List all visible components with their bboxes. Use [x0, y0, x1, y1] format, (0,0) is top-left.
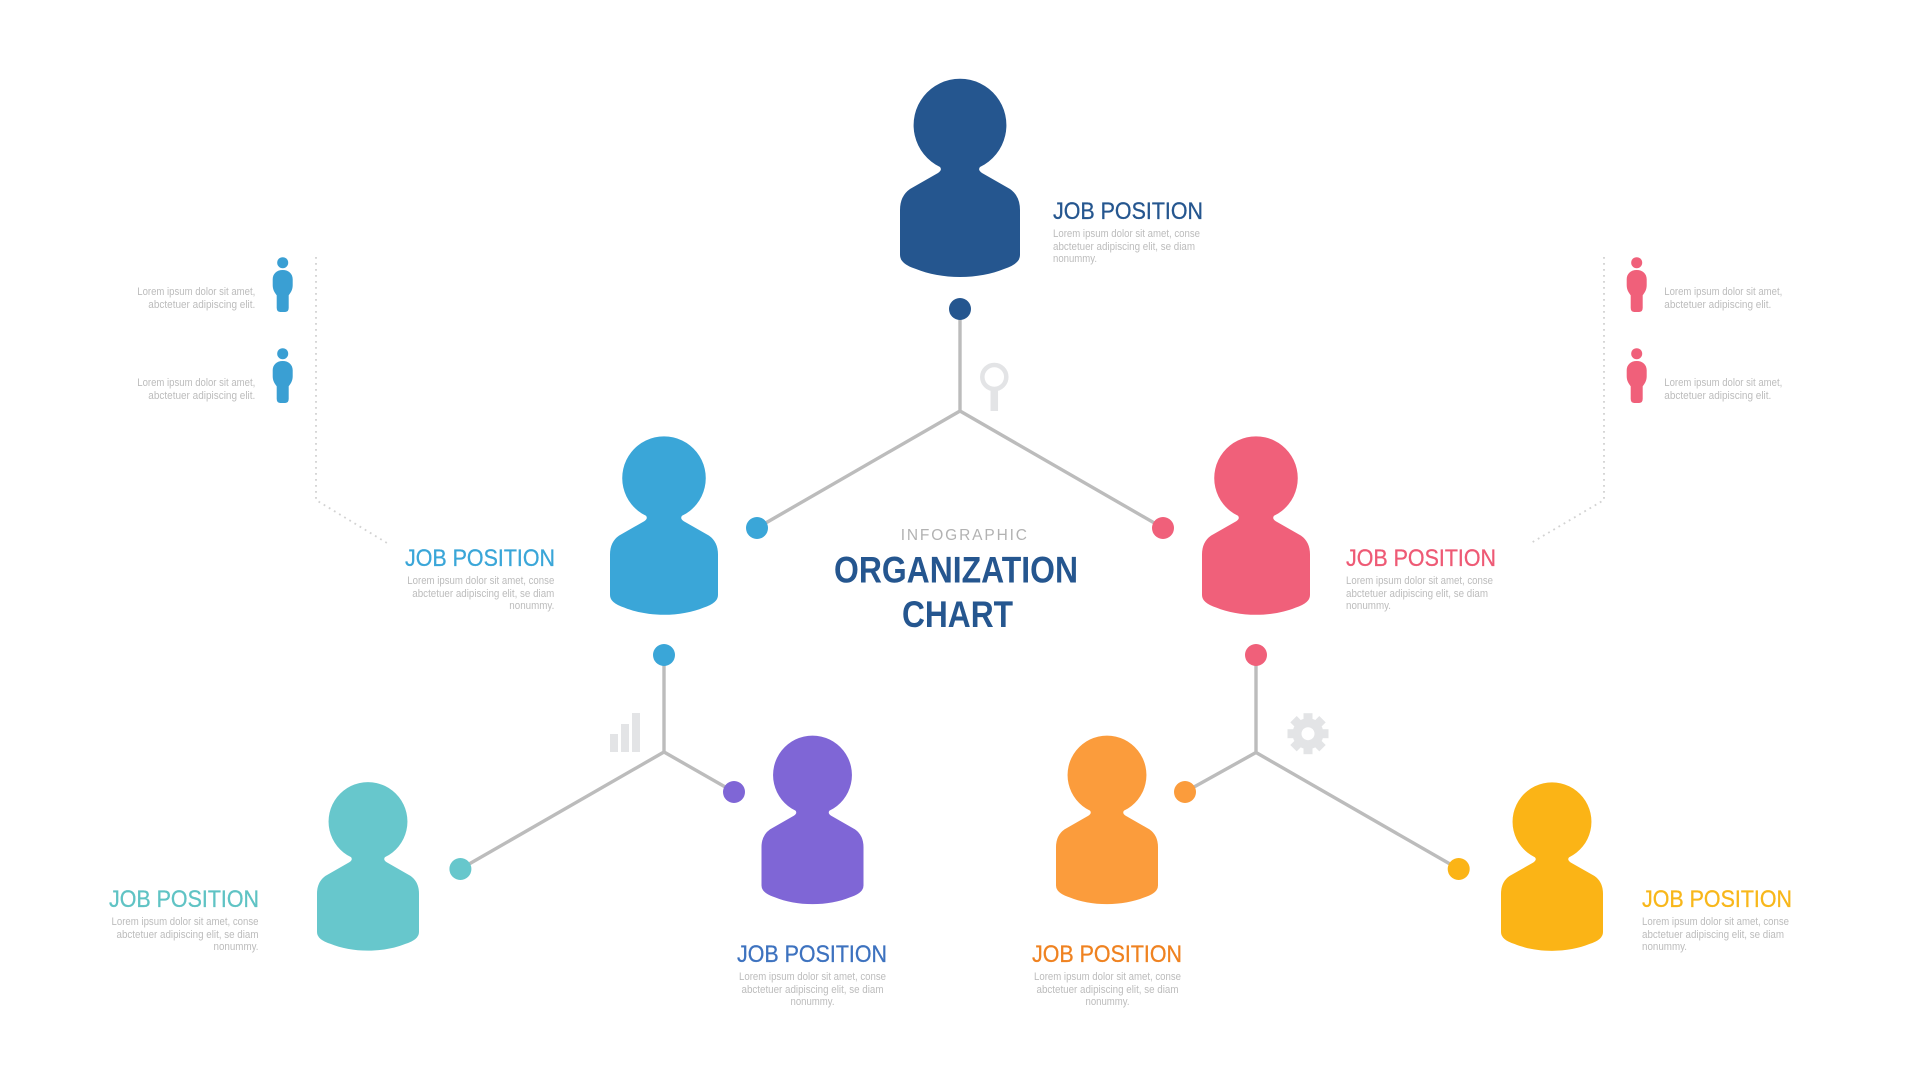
label: yellow job position: abctetuer adipiscing elit, se diam	[1642, 929, 1784, 941]
person: bottom teal	[317, 782, 419, 951]
person: top navy	[900, 79, 1020, 277]
label: top navy job position: abctetuer adipiscing elit, se diam	[1053, 241, 1195, 253]
label: purple node job position: abctetuer adipiscing elit, se diam	[742, 984, 884, 996]
node dot: blue upper	[746, 517, 768, 539]
label: blue job position: JOB POSITION	[405, 545, 555, 572]
connector lines: left branch	[460, 655, 734, 869]
label: pink job position: abctetuer adipiscing elit, se diam	[1346, 588, 1488, 600]
central title	[834, 527, 1078, 635]
label: pink job position: Lorem ipsum dolor sit amet, conse	[1346, 575, 1493, 587]
label: purple node job position: nonummy.	[790, 996, 834, 1008]
label: teal job position	[109, 886, 259, 953]
node dot: pink upper	[1152, 517, 1174, 539]
label: top navy job position	[1053, 198, 1203, 265]
small text: right 2: Lorem ipsum dolor sit amet,	[1664, 377, 1782, 389]
dotted connector: right	[1531, 257, 1604, 543]
label: yellow job position: JOB POSITION	[1642, 886, 1792, 913]
dotted connector: left	[316, 257, 387, 543]
small text: right 2: abctetuer adipiscing elit.	[1664, 390, 1771, 402]
label: teal job position: JOB POSITION	[109, 886, 259, 913]
label: blue job position: abctetuer adipiscing elit, se diam	[412, 588, 554, 600]
node dot: purple	[723, 781, 745, 803]
node dot: pink lower	[1245, 644, 1267, 666]
person: bottom orange	[1056, 736, 1158, 904]
central title: INFOGRAPHIC	[901, 527, 1027, 544]
label: purple node job position: Lorem ipsum dolor sit amet, conse	[739, 971, 886, 983]
small text: left 2: abctetuer adipiscing elit.	[148, 390, 255, 402]
label: top navy job position: JOB POSITION	[1053, 198, 1203, 225]
label: teal job position: nonummy.	[214, 941, 258, 953]
label: orange job position: nonummy.	[1086, 996, 1130, 1008]
label: pink job position: nonummy.	[1346, 600, 1391, 612]
central title: ORGANIZATION	[834, 549, 1078, 590]
small text: left 1: abctetuer adipiscing elit.	[148, 299, 255, 311]
small person: left 2	[273, 348, 293, 403]
small person: left 1	[273, 257, 293, 312]
person: middle pink	[1202, 436, 1310, 615]
label: top navy job position: nonummy.	[1053, 253, 1097, 265]
small person: right 1	[1627, 257, 1647, 312]
label: orange job position: JOB POSITION	[1032, 941, 1182, 968]
small text: right 1: abctetuer adipiscing elit.	[1664, 299, 1771, 311]
icon: bar chart	[610, 713, 640, 752]
label: orange job position	[1032, 941, 1182, 1008]
label: blue job position	[405, 545, 555, 612]
small text: right 1	[1664, 286, 1782, 311]
node dot: yellow	[1448, 858, 1470, 880]
label: yellow job position	[1642, 886, 1792, 953]
label: orange job position: Lorem ipsum dolor sit amet, conse	[1034, 971, 1181, 983]
icon: gear	[1288, 713, 1328, 754]
label: teal job position: abctetuer adipiscing elit, se diam	[116, 929, 259, 941]
small text: right 2	[1664, 377, 1782, 402]
person: middle blue	[610, 436, 718, 615]
small person: right 2	[1627, 348, 1647, 403]
connector lines: top level	[757, 309, 1163, 528]
person: bottom purple	[762, 736, 864, 904]
small text: left 1	[137, 286, 255, 311]
label: yellow job position: nonummy.	[1642, 941, 1687, 953]
small text: left 2: Lorem ipsum dolor sit amet,	[137, 377, 255, 389]
label: purple node job position: JOB POSITION	[737, 941, 887, 968]
label: pink job position	[1346, 545, 1496, 612]
label: teal job position: Lorem ipsum dolor sit amet, conse	[112, 916, 259, 928]
small text: left 2	[137, 377, 255, 402]
person: bottom yellow	[1501, 782, 1603, 951]
node dot: teal	[449, 858, 471, 880]
icon: magnifier	[982, 365, 1006, 411]
node dot: blue lower	[653, 644, 675, 666]
label: blue job position: nonummy.	[509, 600, 554, 612]
label: purple node job position	[737, 941, 887, 1008]
connector lines: right branch	[1185, 655, 1459, 869]
small text: left 1: Lorem ipsum dolor sit amet,	[137, 286, 255, 298]
node dot: orange	[1174, 781, 1196, 803]
label: orange job position: abctetuer adipiscing elit, se diam	[1036, 984, 1179, 996]
node dot: navy	[949, 298, 971, 320]
label: pink job position: JOB POSITION	[1346, 545, 1496, 572]
label: top navy job position: Lorem ipsum dolor sit amet, conse	[1053, 228, 1200, 240]
label: yellow job position: Lorem ipsum dolor sit amet, conse	[1642, 916, 1789, 928]
central title: CHART	[902, 594, 1013, 635]
label: blue job position: Lorem ipsum dolor sit amet, conse	[407, 575, 554, 587]
small text: right 1: Lorem ipsum dolor sit amet,	[1664, 286, 1782, 298]
